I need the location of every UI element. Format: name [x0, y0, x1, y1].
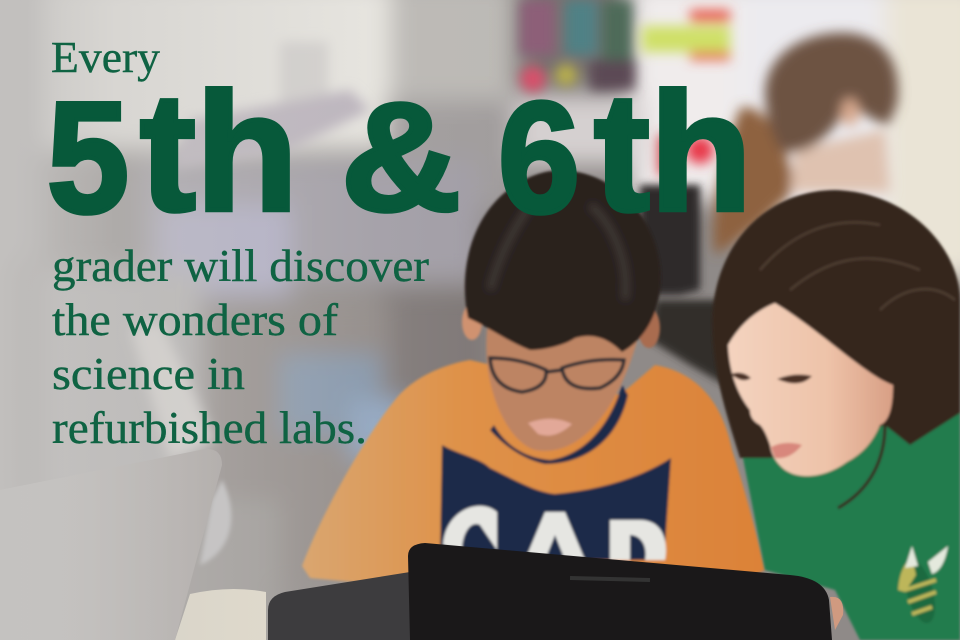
headline: 5th & 6th: th: [594, 58, 752, 246]
girl green shirt: [743, 405, 960, 640]
girl hair back: [712, 190, 960, 458]
boy sweater: [302, 360, 765, 600]
boy sweater letters: [443, 506, 666, 560]
girl eyes: [731, 373, 812, 383]
boy mouth: [528, 419, 572, 436]
headline: 5th & 6th: [47, 58, 752, 246]
body text: the wonders of: [52, 295, 338, 345]
bee mascot: [898, 546, 948, 626]
boy face: [486, 300, 640, 451]
boy hair: [465, 171, 661, 352]
body text: refurbished labs.: [52, 403, 367, 453]
body text: [52, 241, 429, 453]
boy: [302, 171, 765, 600]
headline: 5th & 6th: th: [140, 58, 298, 246]
laptop in foreground: [0, 449, 266, 640]
body text: grader will discover: [52, 241, 429, 291]
boy hair highlights: [490, 205, 626, 300]
body text: science in: [52, 349, 245, 399]
boy glasses: [490, 358, 624, 392]
boy sweater navy panel: [440, 445, 671, 560]
girl face: [728, 303, 893, 476]
headline: 5th & 6th: 6: [498, 70, 580, 246]
heading: Every: Every: [51, 33, 160, 82]
tablet: [268, 543, 843, 640]
table edge: [175, 589, 266, 640]
girl hair strands: [760, 222, 955, 310]
girl mouth: [771, 443, 802, 458]
boy collar: [490, 385, 628, 464]
headline: 5th & 6th: &: [341, 71, 461, 243]
blurred posters: [520, 0, 730, 175]
headline: 5th & 6th: 5: [47, 70, 129, 246]
girl loose hair strand: [838, 425, 885, 508]
blurred chair: [640, 185, 700, 295]
girl: [712, 190, 960, 640]
blurred monitor on desk: [130, 42, 370, 460]
boy ears: [462, 304, 660, 348]
blurred girl in background: [713, 33, 898, 255]
